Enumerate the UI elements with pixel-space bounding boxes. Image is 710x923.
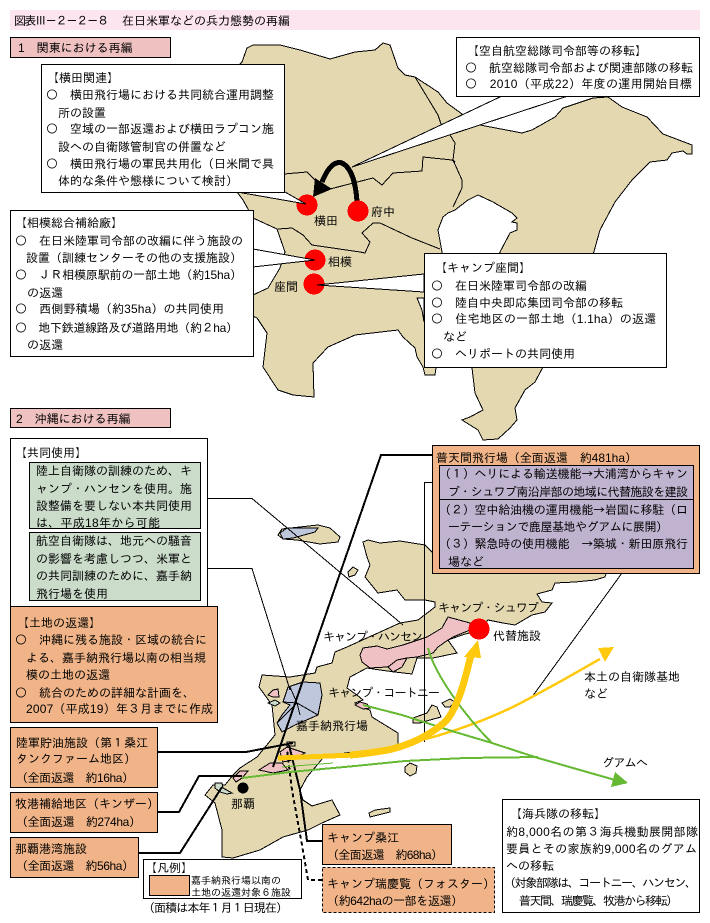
island: Okinawa main — [205, 540, 607, 858]
label: Naha: 那覇 — [231, 797, 255, 811]
box: Camp Foster: キャンプ瑞慶覧（フォスター） — [327, 877, 495, 891]
panel: Marine relocation: 要員とその家族約9,000名のグアム — [506, 842, 697, 856]
island: Ie — [278, 525, 340, 544]
box: Makiminato: （全面返還 約274ha） — [16, 815, 141, 829]
marker: Naha — [238, 782, 248, 794]
label: mainland bases: 本土の自衛隊基地 — [584, 670, 680, 684]
box: Futenma functions: 場など — [448, 555, 484, 569]
callout pointer: air defense command — [352, 96, 568, 167]
box: Futenma functions: ブ・シュワブ南沿岸部の地域に代替施設を建設 — [448, 485, 688, 499]
panel: land return — [10, 606, 218, 722]
islands: east — [413, 705, 441, 723]
label: Fuchu: 府中 — [371, 205, 395, 219]
box: GSDF training: 陸上自衛隊の訓練のため、キ — [36, 464, 192, 478]
box: ASDF training: の影響を考慮しつつ、米軍と — [36, 552, 192, 566]
panel: Marine relocation: への移転 — [506, 859, 554, 873]
section heading: Okinawa: 2 沖縄における再編 — [16, 412, 131, 426]
area: Kadena — [277, 682, 322, 732]
callout: Yokota: 体的な条件や態様について検討） — [58, 174, 238, 188]
box: ASDF training: の共同訓練のために、嘉手納 — [36, 569, 192, 583]
marker: Yokota — [296, 194, 318, 216]
panel: land return: 模の土地の返還 — [26, 668, 110, 682]
callout: air defense command relocation — [456, 38, 700, 96]
label: Yokota: 横田 — [314, 214, 338, 228]
callout: Camp Zama: ○ 住宅地区の一部土地（1.1ha）の返還 — [431, 312, 656, 326]
label: to Guam: グアムへ — [602, 756, 648, 770]
title: 図表Ⅲ－２－２－８ — [14, 14, 109, 28]
note: area date: （面積は本年１月１日現在） — [143, 901, 288, 915]
panel: land return: ○ 沖縄に残る施設・区域の統合に — [15, 633, 207, 647]
island: south — [369, 808, 390, 817]
label: Camp Courtney: キャンプ・コートニー — [328, 686, 440, 700]
panel: Marine relocation: 約8,000名の第３海兵機動展開部隊 — [506, 825, 698, 839]
box: Camp Kuwae: （全面返還 約68ha） — [327, 848, 443, 862]
arrow: thin yellow to mainland — [400, 647, 614, 745]
box: Naha port — [10, 838, 138, 878]
island: southeast — [405, 763, 417, 776]
area: Camp Zukeran — [259, 763, 288, 773]
box: Naha port: 那覇港湾施設 — [15, 842, 87, 856]
box: GSDF training: ャンプ・ハンセンを使用。施 — [36, 482, 192, 496]
callout: Yokota — [42, 64, 284, 192]
callout: air defense command relocation: ○ 航空総隊司令部および関連部隊の移転 — [465, 61, 693, 75]
label: mainland bases: など — [584, 687, 608, 701]
callout: Camp Zama: など — [443, 330, 467, 344]
callout: Camp Zama: ○ 在日米陸軍司令部の改編 — [431, 279, 587, 293]
box: GSDF training: 設整備を要しない本共同使用 — [36, 499, 192, 513]
section heading: Okinawa — [10, 408, 170, 428]
box: Futenma functions: （１）ヘリによる輸送機能→大浦湾からキャン — [439, 467, 688, 481]
callout pointer: Camp Zama — [317, 274, 424, 292]
box: Army fuel depot: 陸軍貯油施設（第１桑江 — [16, 736, 148, 750]
panel: land return: 【土地の返還】 — [17, 616, 101, 630]
legend: 嘉手納飛行場以南の — [191, 875, 281, 887]
area: Ie training field — [280, 528, 318, 539]
box: Futenma functions: （３）緊急時の使用機能 →築城・新田原飛行 — [439, 537, 688, 551]
panel: land return: よる、嘉手納飛行場以南の相当規 — [26, 651, 206, 665]
area: Makiminato — [233, 771, 248, 782]
box: Camp Kuwae: キャンプ桑江 — [327, 831, 399, 845]
callout: air defense command relocation: ○ 2010（平成22）年度の運用開始目標 — [465, 77, 692, 91]
callout: Camp Zama: 【キャンプ座間】 — [435, 261, 531, 275]
callout: Sagami depot: 【相模総合補給廠】 — [15, 216, 123, 230]
callout: Yokota: 【横田関連】 — [47, 71, 119, 85]
panel: Futenma: 普天間飛行場（全面返還 約481ha） — [436, 451, 637, 465]
marker: Sagami — [304, 250, 326, 270]
box: GSDF training — [30, 462, 200, 530]
callout: Sagami depot — [10, 210, 254, 356]
arrow: thin green from Kadena — [282, 763, 333, 767]
area: small green — [268, 700, 280, 706]
area: Camp Courtney — [355, 702, 370, 709]
panel: Marine relocation: 普天間、瑞慶覧、牧港から移転） — [519, 894, 678, 908]
callout: Camp Zama — [424, 254, 666, 368]
label: mainland bases — [584, 670, 680, 701]
legend: 【凡例】 — [145, 861, 193, 875]
callout: air defense command relocation: 【空自航空総隊司令部等の移転】 — [467, 44, 647, 58]
panel: Marine relocation: 【海兵隊の移転】 — [510, 807, 606, 821]
box: Camp Kuwae — [322, 824, 452, 864]
marker: Zama — [304, 274, 324, 294]
box: GSDF training: は、平成18年から可能 — [36, 516, 160, 530]
legend: 土地の返還対象６施設 — [191, 887, 291, 899]
box: Naha port: （全面返還 約56ha） — [16, 859, 134, 873]
leader lines — [138, 455, 622, 880]
panel: land return: ○ 統合のための詳細な計画を、 — [15, 686, 195, 700]
callout: Sagami depot: の返還 — [27, 286, 63, 300]
label: Sagami: 相模 — [328, 255, 352, 269]
area: Hansen south — [388, 658, 407, 672]
box: ASDF training: 飛行場を使用 — [36, 587, 108, 601]
callout: Sagami depot: ○ 西側野積場（約35ha）の共同使用 — [15, 302, 224, 316]
map: Okinawa — [205, 525, 607, 858]
area: Naha port — [215, 783, 232, 794]
callout: Sagami depot: ○ ＪＲ相模原駅前の一部土地（約15ha） — [15, 268, 242, 282]
box: Army fuel depot: （全面返還 約16ha） — [16, 771, 134, 785]
box: Army fuel depot: タンクファーム地区） — [16, 752, 136, 766]
area: small pink north — [268, 689, 279, 697]
area: Kuwae — [280, 747, 305, 762]
label: Zama: 座間 — [274, 280, 298, 294]
callout pointer: Sagami depot — [253, 249, 315, 267]
panel: Marine relocation — [502, 800, 700, 912]
title — [10, 10, 700, 30]
callout pointer: Yokota — [237, 192, 306, 204]
panel: Marine relocation: （対象部隊は、コートニー、ハンセン、 — [504, 876, 697, 890]
island: small north — [348, 567, 358, 577]
label: Camp Schwab: キャンプ・シュワブ — [438, 601, 539, 615]
section heading: Kanto: 1 関東における再編 — [18, 41, 133, 55]
section heading: Kanto — [10, 38, 170, 58]
panel: land return: 2007（平成19）年３月までに作成 — [26, 702, 213, 716]
callout: Camp Zama: ○ 陸自中央即応集団司令部の移転 — [431, 296, 623, 310]
callout: Yokota: ○ 空域の一部返還および横田ラプコン施 — [46, 122, 274, 136]
box: ASDF training — [30, 532, 200, 601]
box: Camp Foster: （約642haの一部を返還） — [327, 894, 463, 908]
map: Kanto region — [225, 43, 692, 440]
panel: Futenma — [432, 446, 700, 574]
area: Camp Hansen and Schwab — [360, 617, 470, 668]
legend — [144, 860, 302, 899]
arrow: green to Guam — [242, 648, 628, 787]
callout: Sagami depot: 設置（訓練センターその他の支援施設） — [26, 251, 242, 265]
box: Futenma functions: （２）空中給油機の運用機能→岩国に移駐（ロ — [439, 503, 688, 517]
label: Camp Hansen: キャンプ・ハンセン — [323, 630, 423, 644]
callout: Sagami depot: ○ 地下鉄道線路及び道路用地（約２ha） — [15, 321, 238, 335]
box: Camp Foster — [322, 868, 495, 912]
callout: Yokota: ○ 横田飛行場における共同統合運用調整 — [46, 88, 274, 102]
callout: Yokota: ○ 横田飛行場の軍民共用化（日米間で具 — [46, 157, 274, 171]
callout: Yokota: 設への自衛隊管制官の併置など — [58, 140, 226, 154]
title: 在日米軍などの兵力態勢の再編 — [122, 14, 290, 28]
marker: replacement facility — [468, 618, 490, 640]
box: Makiminato: 牧港補給地区（キンザー） — [15, 797, 159, 811]
callout: Yokota: 所の設置 — [58, 106, 106, 120]
box: Makiminato — [10, 792, 159, 832]
box: ASDF training: 航空自衛隊は、地元への騒音 — [36, 534, 192, 548]
box: Futenma functions: ーテーションで鹿屋基地やグアムに展開） — [448, 520, 668, 534]
label: Kadena airfield: 嘉手納飛行場 — [296, 719, 368, 733]
area: tank farm — [287, 742, 295, 746]
panel: joint use — [10, 438, 208, 608]
arrow: thick yellow to replacement facility — [278, 640, 481, 758]
box: Army fuel depot — [10, 728, 158, 788]
label: replacement facility: 代替施設 — [493, 629, 541, 643]
callout: Sagami depot: ○ 在日米陸軍司令部の改編に伴う施設の — [15, 234, 243, 248]
island: east small — [442, 699, 455, 707]
callout: Sagami depot: の返還 — [27, 338, 63, 352]
marker: Fuchu — [348, 200, 368, 222]
callout: Camp Zama: ○ ヘリポートの共同使用 — [431, 347, 575, 361]
panel: joint use: 【共同使用】 — [15, 446, 87, 460]
arrow: Fuchu to Yokota — [313, 163, 357, 202]
box: Futenma functions — [439, 466, 694, 569]
